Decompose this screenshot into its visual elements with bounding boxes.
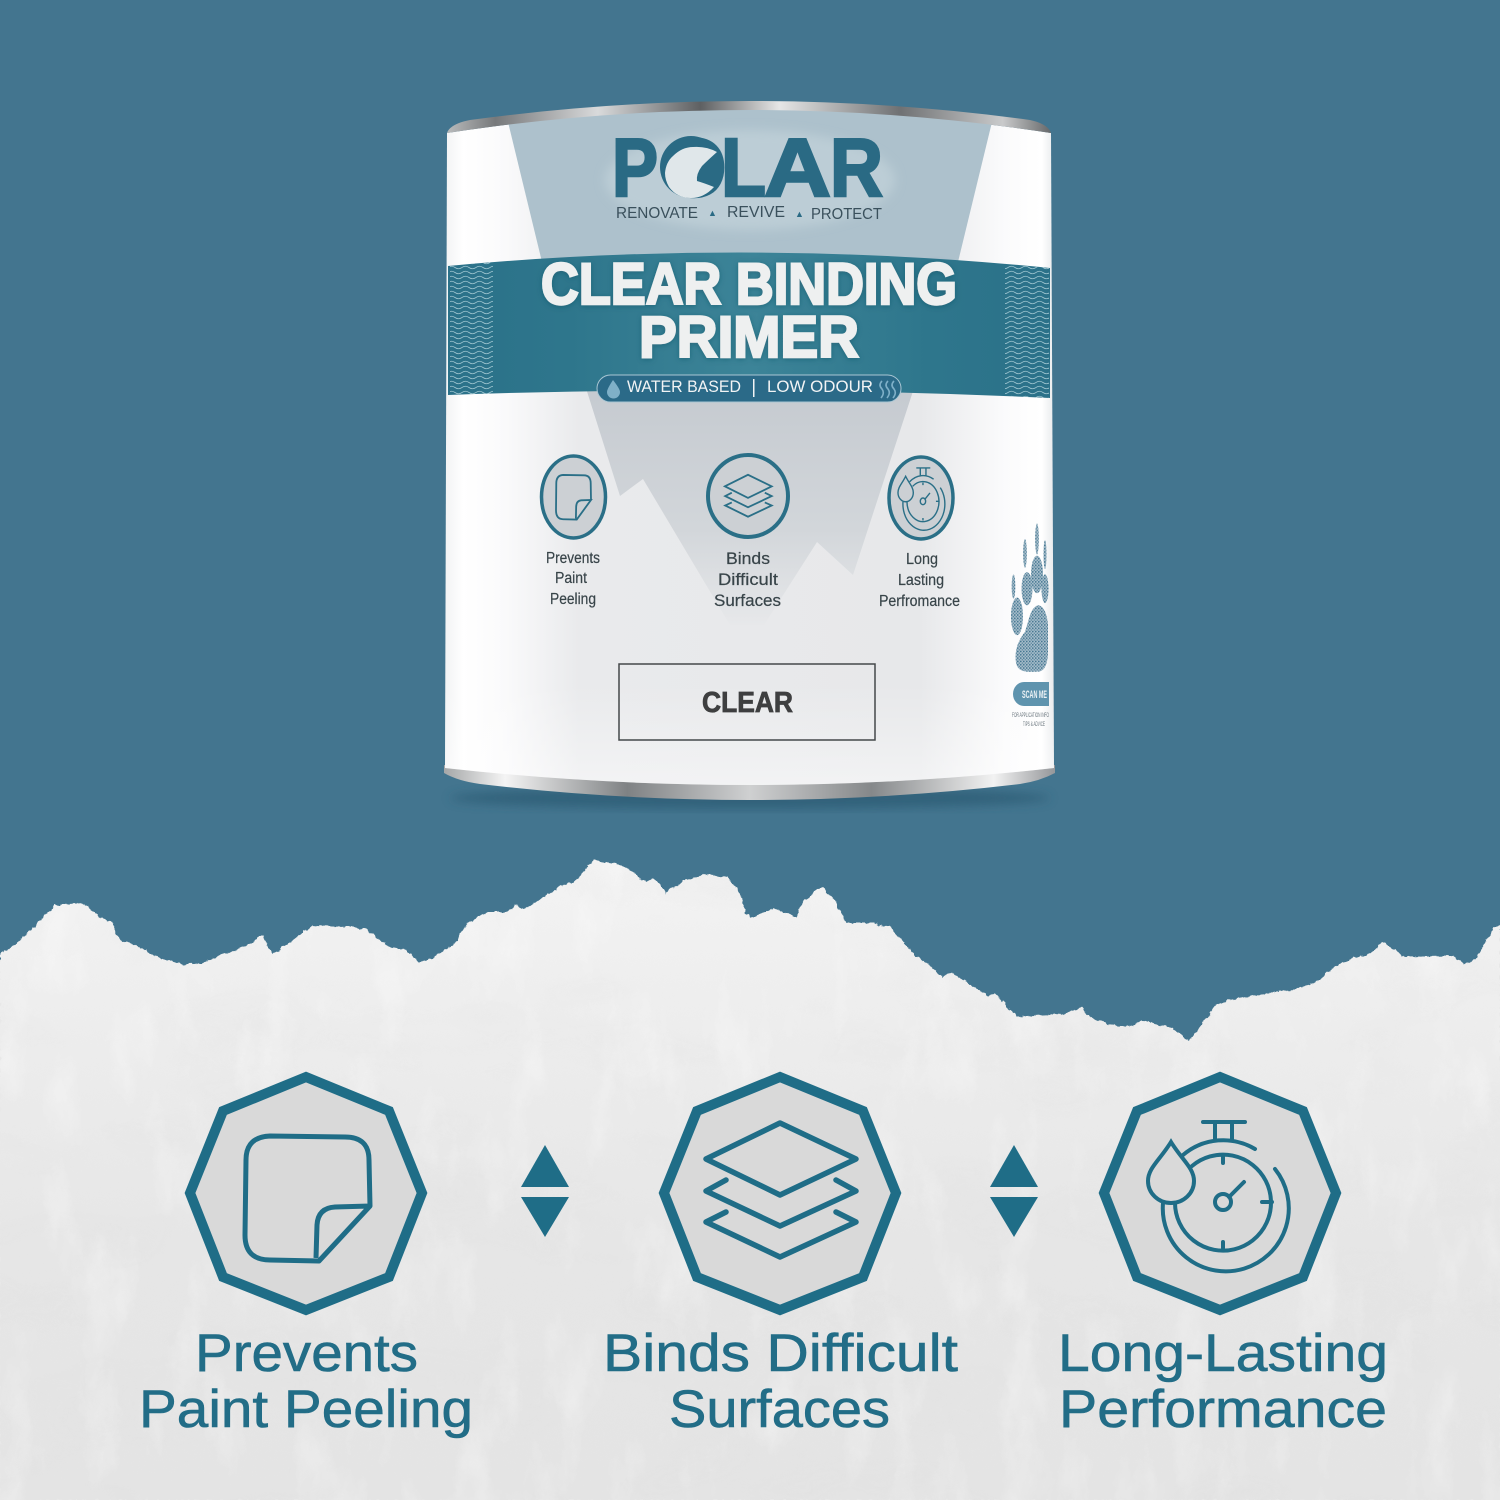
paint can: [444, 101, 1055, 809]
icon: stacked layers: [706, 1123, 856, 1257]
label: Performance: [1059, 1380, 1387, 1439]
label: Surfaces: [669, 1380, 890, 1439]
feature: binds difficult surfaces: [603, 1077, 958, 1439]
can bottom rim: [444, 765, 1055, 800]
can icon: stopwatch badge: [889, 457, 953, 539]
label upper panel: [508, 106, 992, 262]
can feature labels: Peeling: [550, 591, 596, 608]
can icon: peeling sheet badge: [542, 456, 606, 538]
scan me tag: [1012, 682, 1049, 728]
water based low odour pill: [597, 375, 901, 402]
feature: long-lasting performance: [1058, 1077, 1388, 1439]
can feature labels: Difficult: [718, 571, 778, 589]
octagon badge: [664, 1077, 896, 1310]
icon: water drops: [607, 380, 620, 398]
brand logo: [612, 121, 883, 214]
label: [603, 1324, 958, 1439]
tagline: ▲: [708, 208, 717, 218]
can feature labels: Lasting: [898, 572, 944, 589]
label: [139, 1324, 473, 1439]
octagon badge: [190, 1077, 422, 1310]
label: Long-Lasting: [1058, 1324, 1388, 1383]
arrow: up down divider two: [990, 1145, 1038, 1237]
label: [1058, 1324, 1388, 1439]
can feature labels: Long: [906, 551, 938, 568]
wordmark: O: [662, 121, 727, 214]
mountain backdrop: [0, 859, 1500, 1100]
can feature labels: Perfromance: [879, 593, 960, 610]
paint can: FOR APPLICATION INFO: [1012, 712, 1049, 719]
scan me tag: SCAN ME: [1022, 689, 1047, 701]
arrow: up down divider one: [521, 1145, 569, 1237]
can feature labels: Binds: [726, 550, 770, 568]
can feature labels: Surfaces: [714, 592, 781, 610]
logo O disc: [660, 136, 722, 198]
tagline: ▲: [795, 209, 804, 219]
label: Prevents: [195, 1324, 418, 1383]
icon: peeling sheet: [245, 1136, 370, 1261]
can feature labels: Prevents: [546, 550, 600, 567]
pill text left: WATER BASED: [627, 377, 741, 396]
product title: PRIMER: [639, 305, 859, 370]
can feature labels: Paint: [555, 570, 588, 587]
tagline: RENOVATE: [616, 205, 698, 222]
can shadow: [450, 787, 1050, 809]
tagline: PROTECT: [811, 206, 882, 223]
wordmark: A: [764, 121, 831, 214]
feature: prevents paint peeling: [139, 1077, 473, 1439]
icon: stopwatch with drop: [1148, 1122, 1289, 1271]
label: Paint Peeling: [139, 1380, 473, 1439]
can feature labels: [546, 550, 960, 610]
product title: CLEAR BINDING: [541, 252, 957, 317]
tagline: REVIVE: [727, 204, 785, 221]
wordmark: R: [830, 121, 883, 214]
label mountain panel: [585, 385, 915, 625]
colour name box: [619, 664, 875, 740]
body lower highlight: [445, 110, 1054, 785]
scan me tag: TIPS & ADVICE: [1023, 721, 1045, 728]
label: Binds Difficult: [603, 1324, 958, 1383]
icon: paw print: [1011, 524, 1048, 672]
pill text right: LOW ODOUR: [767, 377, 873, 396]
wave pattern right: [1005, 262, 1049, 398]
can body: [445, 110, 1054, 785]
icon: vapour: [880, 381, 895, 398]
can icon: layers badge: [708, 455, 788, 537]
octagon badge: [1104, 1077, 1336, 1310]
can top rim: [447, 101, 1051, 133]
mountain base fill: [0, 930, 1500, 1500]
polar bear silhouette: [665, 147, 717, 198]
wordmark: P: [612, 121, 658, 214]
logo glow: [605, 130, 895, 230]
pill separator: [753, 379, 754, 397]
wordmark: [612, 121, 883, 214]
tagline: [616, 204, 882, 223]
wordmark: L: [721, 121, 766, 214]
colour name box: CLEAR: [702, 687, 793, 719]
wave pattern left: [450, 262, 493, 398]
product title: [541, 252, 957, 370]
teal label band: [448, 252, 1050, 398]
